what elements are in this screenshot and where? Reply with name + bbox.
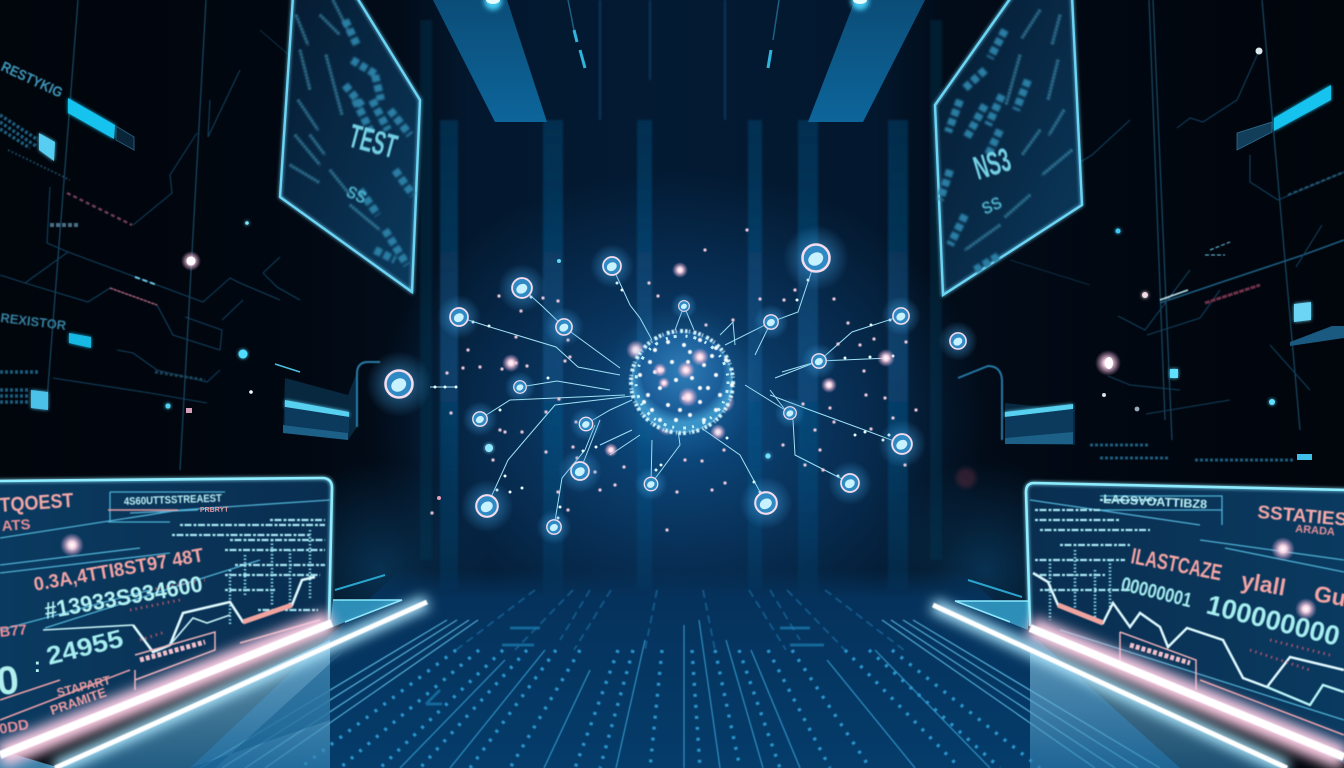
lower right data panel: ylall bbox=[1239, 567, 1288, 601]
right wall widget bbox=[958, 366, 1075, 445]
central sphere bbox=[604, 304, 760, 460]
lower left data panel: STAPART bbox=[55, 673, 113, 700]
vertical corridor columns bbox=[420, 0, 942, 600]
lower left data panel: 0.3A,4TTI8ST97 48T bbox=[32, 545, 206, 596]
lower left data panel bbox=[0, 478, 332, 755]
left wall readouts and labels bbox=[0, 58, 253, 413]
lower right data panel bbox=[1026, 483, 1344, 765]
connector beads bbox=[435, 280, 893, 518]
lower right data panel: ILASTCAZE bbox=[1129, 543, 1224, 585]
upper right hologram panel: NS3 bbox=[969, 140, 1015, 187]
upper left hologram panel: TEST bbox=[345, 116, 401, 166]
outer nodes bbox=[366, 225, 978, 545]
glowing neon floor bars bbox=[0, 602, 1344, 768]
lower left data panel: ATS bbox=[1, 516, 31, 535]
lower left data panel: PRAMITE bbox=[48, 685, 109, 718]
panel circuit detail bbox=[1030, 496, 1344, 735]
network diagram: sphere hub with radiating nodes bbox=[366, 225, 978, 545]
left wall readouts and labels: RESTYKIG bbox=[0, 58, 65, 102]
panel circuit detail bbox=[0, 492, 330, 720]
ceiling light beams bbox=[433, 0, 925, 122]
lower right data panel: SSTATIES bbox=[1257, 502, 1344, 530]
lower left data panel: : bbox=[34, 655, 41, 677]
right floor glass reflection bbox=[955, 580, 1290, 768]
connector lines bbox=[430, 258, 902, 527]
lower left data panel: TQOEST bbox=[0, 490, 74, 517]
right wall readouts bbox=[956, 48, 1344, 488]
upper right hologram panel: SS bbox=[978, 192, 1005, 219]
upper left hologram panel: SS bbox=[343, 181, 370, 208]
lower right data panel: 100000000 bbox=[1204, 589, 1343, 652]
lower left data panel: 24955 bbox=[44, 625, 126, 671]
left wall circuitry bbox=[0, 0, 312, 470]
lower right data panel: LAGSVOATTIBZ8 bbox=[1103, 492, 1208, 511]
floor with circuit traces bbox=[190, 570, 1180, 768]
left wall widget bbox=[275, 362, 380, 440]
lower right data panel: 00000001 bbox=[1119, 574, 1194, 612]
pink particles bbox=[432, 230, 916, 530]
left wall readouts and labels: REXISTOR bbox=[0, 310, 68, 333]
upper left hologram panel bbox=[280, 0, 420, 292]
left floor glass reflection bbox=[0, 575, 402, 768]
upper right hologram panel bbox=[935, 0, 1082, 295]
lower left data panel: 4S60UTTSSTREAEST bbox=[124, 493, 222, 508]
lower left data panel: #13933S934600 bbox=[42, 571, 204, 624]
lower right data panel: ARADA bbox=[1295, 523, 1335, 538]
right wall circuitry bbox=[1010, 0, 1344, 460]
lower left data panel: PRBRYT bbox=[200, 506, 229, 514]
